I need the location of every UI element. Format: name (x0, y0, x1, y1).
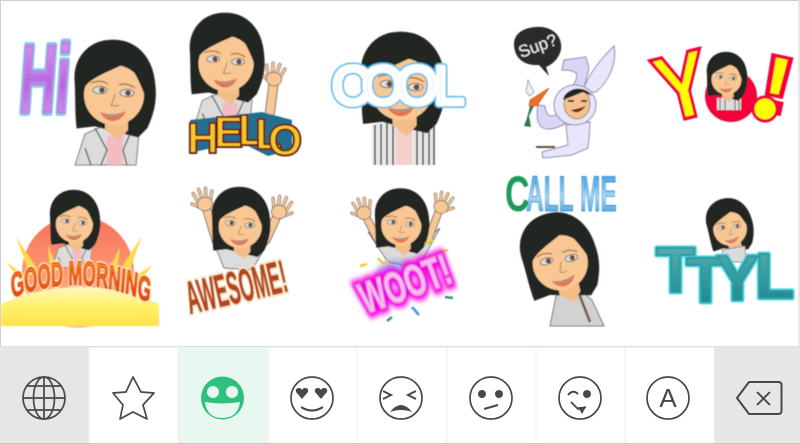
sticker: Good Morning (0, 188, 160, 329)
sticker: Hi: Hi (17, 27, 74, 133)
sticker: Woot: WOOT! (352, 245, 458, 323)
icon: neutral face (470, 377, 512, 419)
sticker: Good Morning: GOOD MORNING (10, 258, 152, 304)
sticker: Sup bunny (514, 27, 615, 158)
sticker: Yo (643, 28, 800, 143)
icon: globe (23, 377, 65, 419)
icon: letter A: A (659, 383, 677, 413)
sticker: Hi: Hi (17, 27, 74, 133)
icon: green smiley selected (201, 376, 244, 420)
sticker: Call me (505, 167, 617, 326)
sticker: Woot: WOOT! (352, 245, 458, 323)
sticker: TTYL: TTYL (656, 234, 794, 316)
sticker: Good Morning: GOOD MORNING (10, 260, 152, 302)
sticker: Awesome: AWESOME! (181, 251, 292, 324)
sticker: TTYL: TTYL (656, 234, 794, 316)
sticker: Awesome (181, 187, 295, 324)
sticker: Cool: COOL (332, 56, 464, 116)
sticker: Hello (187, 13, 302, 165)
sticker: Yo: Y (643, 28, 721, 143)
sticker: Call me: C (505, 167, 530, 223)
sticker: Cool (332, 32, 464, 165)
sticker: Woot (350, 188, 458, 323)
icon: squinting upset face (380, 377, 422, 419)
sticker: Call me: ALL ME (526, 167, 617, 222)
keyboard toolbar (0, 346, 800, 444)
sticker: TTYL (656, 194, 794, 316)
sticker: Hi (17, 27, 156, 165)
icon: letter A (647, 377, 689, 419)
sticker: Hello: HELLO (187, 106, 302, 165)
sticker: Sup bunny: Sup? (516, 30, 560, 62)
icon: backspace (737, 382, 782, 414)
sticker grid (0, 12, 800, 329)
icon: heart eyes face (291, 377, 333, 419)
sticker: Yo: ! (747, 37, 800, 134)
icon: winking tongue face (559, 377, 601, 419)
icon: star (113, 377, 154, 419)
sticker: Cool: COOL (332, 56, 464, 116)
sticker: Awesome: AWESOME! (181, 251, 292, 324)
